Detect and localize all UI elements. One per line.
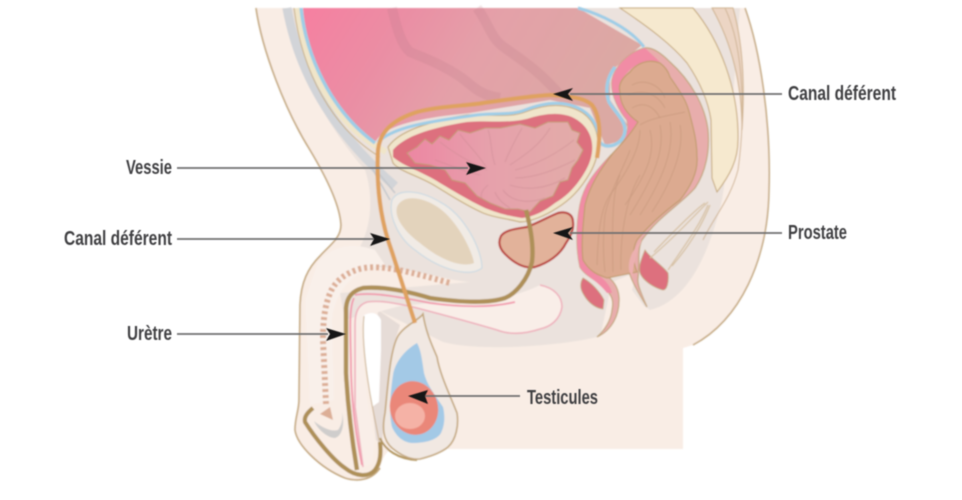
pubic bone halo: [391, 192, 482, 272]
anal right wall: [629, 240, 647, 307]
rectum: [577, 48, 710, 337]
mucosa folds: [435, 128, 575, 208]
leader: prostate: [570, 232, 782, 234]
peritoneum blue line, left: [301, 8, 375, 143]
scrotum outline: [383, 314, 458, 459]
vas deferens: [378, 95, 599, 323]
label: canal déférent, left: Canal déférent: [64, 228, 172, 250]
label: urètre: Urètre: [127, 323, 172, 345]
arrow: urètre: [326, 328, 346, 341]
arrow: canal déférent, right: [553, 88, 573, 101]
leader: urètre: [177, 333, 328, 335]
gray fascia band: [287, 8, 395, 186]
skin line: [256, 8, 380, 480]
urethra pink lining: [350, 294, 515, 465]
front abdominal wall: [256, 8, 395, 480]
tissue beside scrotum: [372, 310, 400, 445]
sacrum: [620, 8, 738, 192]
peritoneum blue line, right: [578, 8, 644, 47]
rectal folds: [597, 82, 685, 272]
hydrocele blue: [390, 343, 444, 443]
penile dot pattern: [323, 267, 450, 404]
rectum contents: [582, 61, 697, 278]
label: canal déférent, right: Canal déférent: [788, 83, 896, 105]
label: vessie: Vessie: [126, 157, 172, 179]
leader lines: [177, 94, 782, 396]
corpus spongiosum: [355, 285, 562, 467]
arrowheads: [326, 88, 573, 404]
arrow: prostate: [553, 227, 573, 240]
intestinal folds: [392, 8, 560, 98]
anal sphincter right: [640, 250, 668, 290]
peritoneum blue line over bladder: [378, 103, 600, 142]
labels: [64, 83, 896, 409]
dot pattern tip: [320, 407, 333, 420]
rectum outer wall: [577, 48, 708, 337]
glans outline: [305, 408, 380, 475]
label: prostate: Prostate: [788, 222, 847, 244]
leader: canal déférent, left: [177, 238, 374, 240]
inner tissue layer: [282, 8, 740, 347]
body silhouette: [256, 8, 769, 480]
back muscle strip: [712, 8, 743, 130]
leader: testicules: [425, 395, 520, 397]
scrotum fold line: [380, 438, 417, 460]
peritoneum blue line, rectovesical pouch: [600, 67, 625, 146]
arrow: canal déférent, left: [370, 233, 390, 246]
prostate: [499, 212, 573, 267]
arrow: vessie: [466, 162, 486, 175]
bladder: [378, 103, 600, 222]
pubic bone body: [397, 198, 474, 264]
bladder outer wall: [388, 105, 598, 222]
leader: vessie: [177, 167, 468, 169]
penile shaft highlight: [305, 246, 385, 405]
scrotum: [380, 314, 458, 460]
natal cleft: [600, 272, 647, 338]
testicle: [384, 376, 444, 440]
crescent at glans: [314, 412, 343, 438]
label: testicules: Testicules: [527, 387, 598, 409]
bladder mucosa: [407, 122, 583, 212]
body cross-section illustration: [256, 8, 769, 480]
abdominal cavity: [303, 8, 642, 145]
testicle highlight: [395, 403, 425, 429]
pubic bone: [391, 192, 482, 272]
cream peritoneum band: [297, 8, 386, 152]
urethra: [346, 210, 533, 470]
bladder muscle: [393, 114, 592, 218]
anal sphincter left: [581, 278, 604, 309]
leader: canal déférent, right: [570, 93, 782, 95]
sacrum and back wall: [620, 8, 769, 345]
gap between shaft and scrotum: [363, 313, 381, 407]
rectum pink lining: [577, 48, 660, 293]
levator fibres: [650, 202, 710, 270]
arrow: testicules: [408, 390, 428, 404]
